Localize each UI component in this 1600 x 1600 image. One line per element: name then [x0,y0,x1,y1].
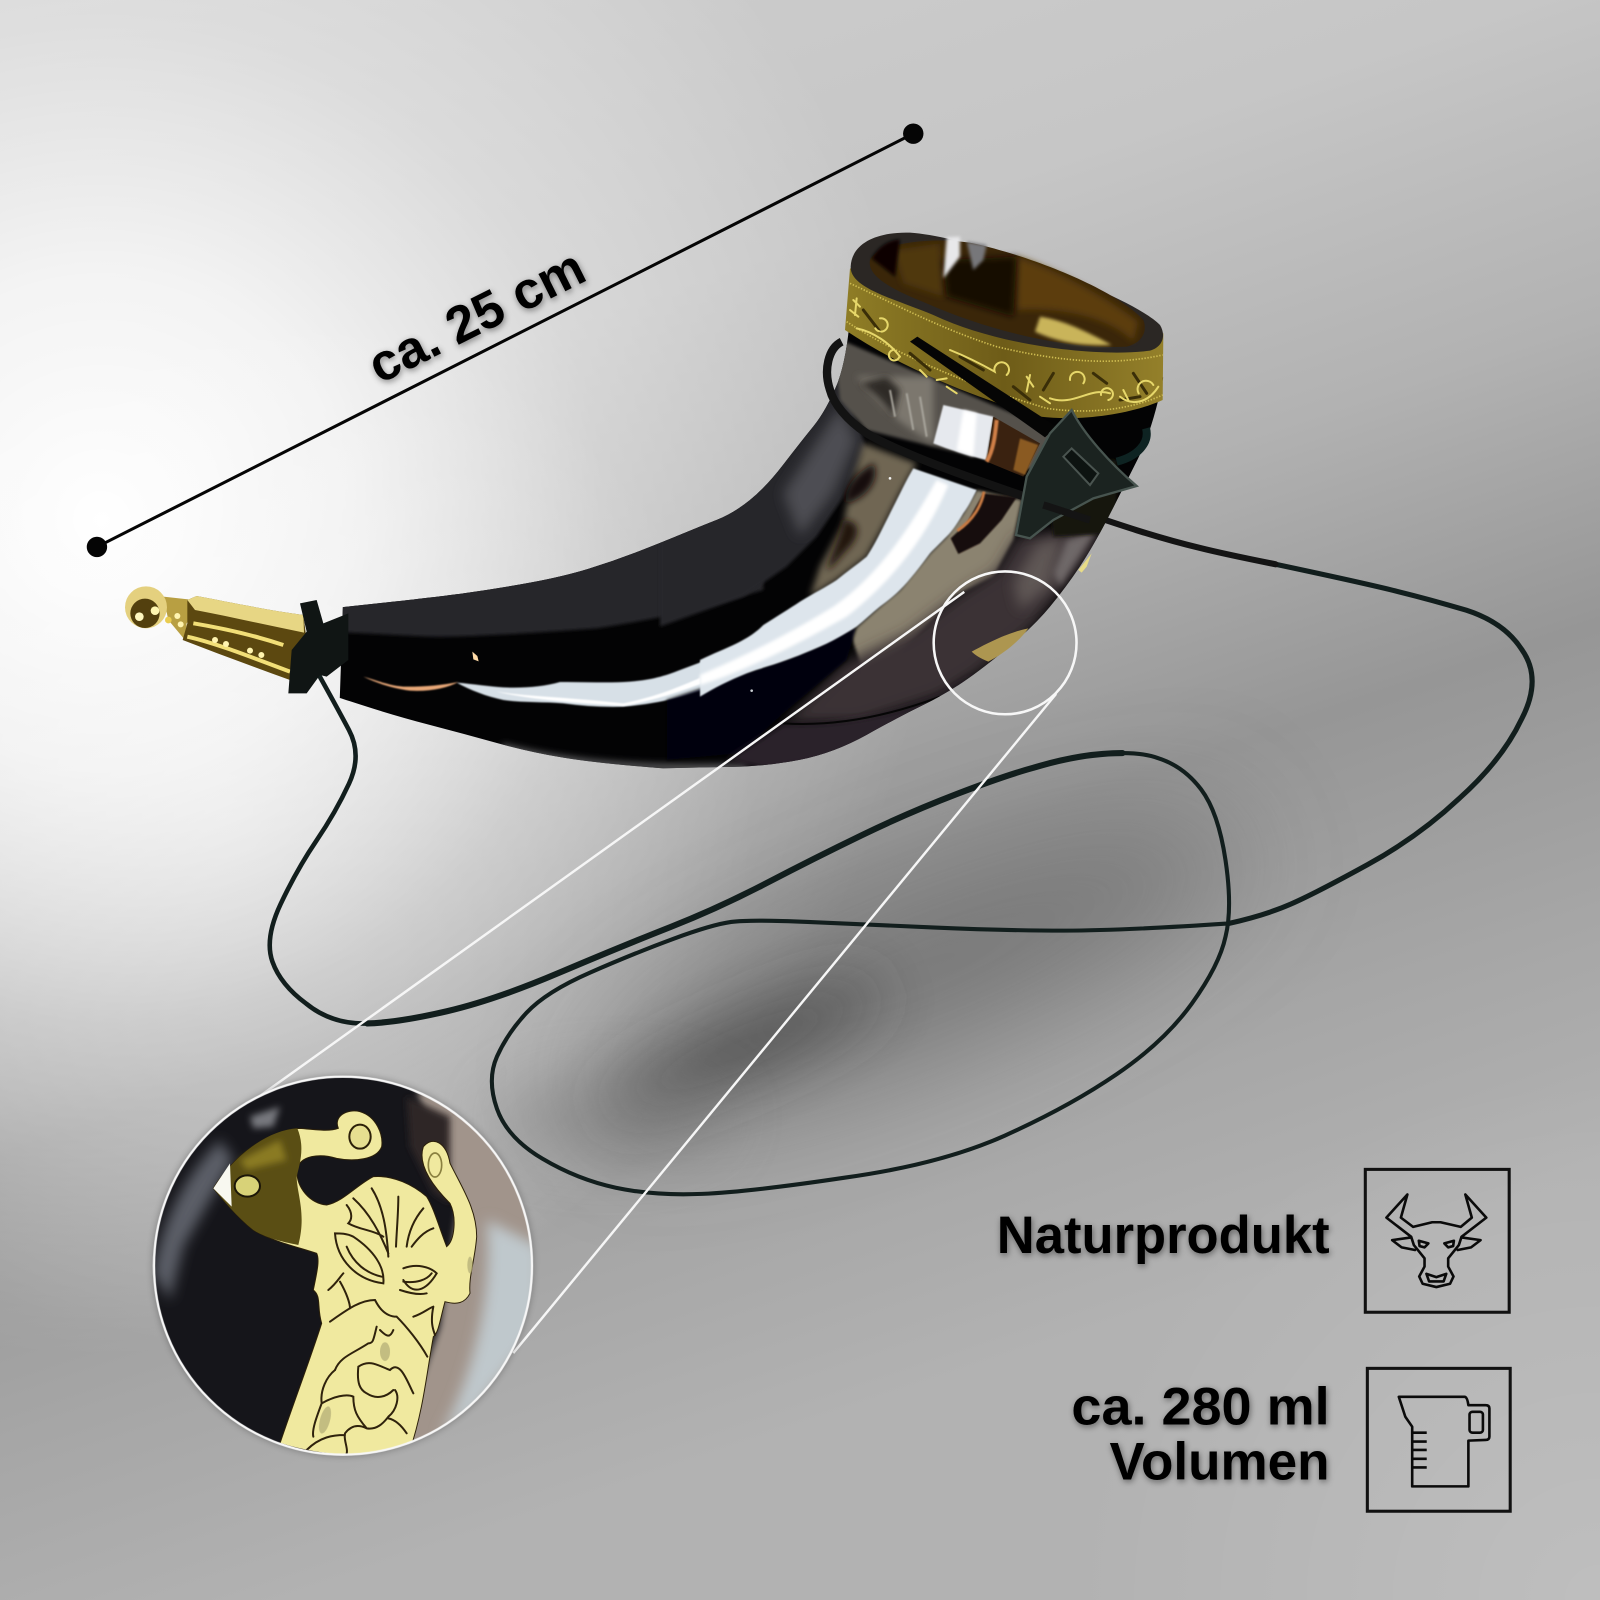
icon box: bull head [1365,1169,1509,1312]
cord right of tie [1117,428,1147,462]
matte upper [660,373,867,627]
leather tie [1016,410,1137,538]
icon box: measuring jug [1367,1368,1510,1511]
drinking horn [125,233,1224,796]
left half of the horn [330,490,763,777]
leather strap [910,337,1057,437]
worn spots [317,1257,473,1435]
right half of the horn [660,337,1117,770]
brass plate [213,1111,477,1456]
neck above cord [837,340,1048,471]
magnified detail: engraved brass fitting [150,1072,536,1460]
neck cord [827,342,1025,497]
brown neck between matte and highlight [810,443,917,597]
horn ground shadow [500,768,1269,1170]
horn body [340,332,1164,768]
mouth of the horn [845,233,1163,462]
gold band [845,268,1163,418]
label: Naturprodukt: Naturprodukt [997,1206,1330,1265]
dimension label: ca. 25 cm [359,238,594,395]
label: volume: Volumen [1110,1433,1330,1492]
lower black [667,627,857,760]
engraved lines [307,1188,437,1453]
magnifier ring on horn [934,571,1077,714]
magnifier connector lines [257,592,1056,1353]
tan area [850,490,1022,680]
label: volume: ca. 280 ml [1071,1377,1330,1436]
label: volume [1071,1377,1330,1492]
brass end cap [125,586,348,693]
leather cord [270,500,1532,1194]
brass fitting on horn [972,553,1092,662]
dimension line: horn length [87,123,923,557]
dark purple lower right [783,527,1100,723]
highlight [700,468,977,697]
horn rim and interior [851,233,1163,353]
dark copper patch [951,493,1017,554]
